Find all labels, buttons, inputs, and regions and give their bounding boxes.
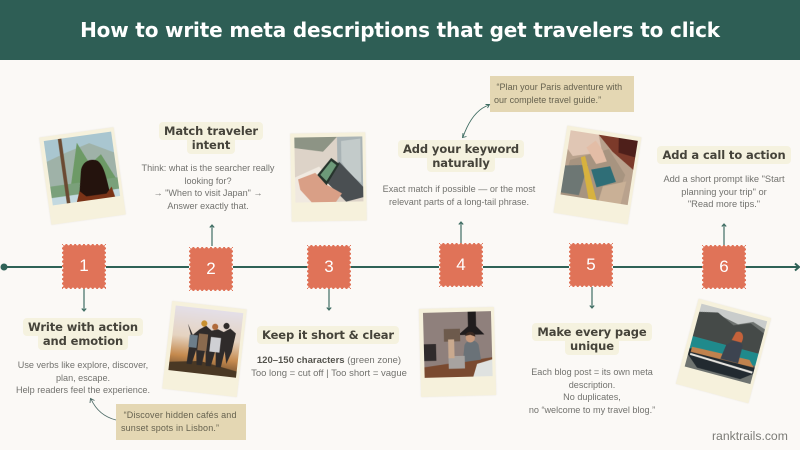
- stamp 4: 4: [456, 255, 466, 274]
- header bar: [0, 0, 800, 60]
- step 2 text: looking for?: [184, 176, 232, 186]
- step 2 text: [142, 163, 274, 211]
- step 6 text: "Read more tips.": [688, 199, 760, 209]
- step 5 text: Each blog post = its own meta: [531, 367, 653, 377]
- step 4 heading: naturally: [432, 156, 490, 170]
- curved arrow: note to step 1: [90, 398, 116, 420]
- step 4 text: [383, 184, 536, 207]
- stamp 2: 2: [206, 259, 216, 278]
- step 1 heading: [23, 318, 143, 350]
- step 5 heading: Make every page: [537, 325, 647, 339]
- polaroid 4: woman with laptop in kitchen: [419, 307, 496, 397]
- stamp 3: [307, 245, 351, 289]
- step 2 text: Think: what is the searcher really: [142, 163, 274, 173]
- step 1 example note: [116, 404, 246, 440]
- stamp 1: 1: [79, 256, 89, 275]
- step 5 text: description.: [569, 380, 615, 390]
- polaroid 2: friends at sunset: [162, 301, 247, 397]
- step 3 text: 120–150 characters (green zone): [257, 355, 401, 366]
- step 2 heading: [159, 122, 263, 154]
- step 4 heading: Add your keyword: [403, 142, 519, 156]
- polaroid 5: packing a suitcase: [554, 126, 641, 224]
- step 5 heading: unique: [570, 339, 614, 353]
- stamp 3: 3: [324, 257, 334, 276]
- polaroid 6: woman on a boat on a lake: [676, 299, 771, 403]
- step 4 heading: [398, 140, 524, 172]
- stamp 6: 6: [719, 257, 729, 276]
- stamp 5: 5: [586, 255, 596, 274]
- step 2 heading: intent: [192, 138, 230, 152]
- step 4 example note: our complete travel guide.”: [494, 95, 601, 105]
- step 3 text: [251, 355, 407, 378]
- title: How to write meta descriptions that get travelers to click: [80, 18, 720, 42]
- step 3 text: Too long = cut off | Too short = vague: [251, 368, 407, 378]
- step 5 heading: [532, 323, 652, 355]
- step 1 example note: “Discover hidden cafés and: [124, 410, 237, 420]
- stamp 5: [569, 243, 613, 287]
- step 4 text: relevant parts of a long-tail phrase.: [389, 196, 529, 206]
- step 6 text: planning your trip" or: [681, 186, 767, 196]
- step 6 heading: Add a call to action: [662, 148, 786, 162]
- step 6 text: Add a short prompt like "Start: [663, 174, 785, 184]
- step 1 example note: sunset spots in Lisbon.”: [121, 423, 219, 433]
- step 5 text: no “welcome to my travel blog.”: [529, 404, 655, 414]
- polaroid 1: woman at window: [39, 127, 126, 225]
- polaroid 3: phone and laptop: [290, 132, 367, 222]
- step 1 heading: and emotion: [43, 334, 123, 348]
- stamp 4: [439, 243, 483, 287]
- curved arrow: note to step 4: [462, 104, 490, 138]
- step 6 text: [663, 174, 785, 209]
- step 3 heading: Keep it short & clear: [262, 328, 394, 342]
- step 2 text: Answer exactly that.: [167, 200, 249, 210]
- step 2 heading: Match traveler: [164, 124, 258, 138]
- step 5 text: [529, 367, 655, 415]
- step 4 example note: “Plan your Paris adventure with: [497, 82, 622, 92]
- step 1 heading: Write with action: [28, 320, 138, 334]
- step 1 text: Help readers feel the experience.: [16, 385, 150, 395]
- step 1 text: Use verbs like explore, discover,: [18, 360, 148, 370]
- step 1 text: plan, escape.: [56, 372, 110, 382]
- stamp 6: [702, 245, 746, 289]
- site credit: ranktrails.com: [712, 429, 788, 443]
- step 4 text: Exact match if possible — or the most: [383, 184, 535, 194]
- step 4 example note: [490, 76, 634, 112]
- step 2 text: → "When to visit Japan" →: [153, 188, 263, 198]
- stamp 1: [62, 244, 106, 289]
- step 5 text: No duplicates,: [563, 392, 621, 402]
- stamp 2: [189, 247, 233, 291]
- step 1 text: [16, 360, 150, 395]
